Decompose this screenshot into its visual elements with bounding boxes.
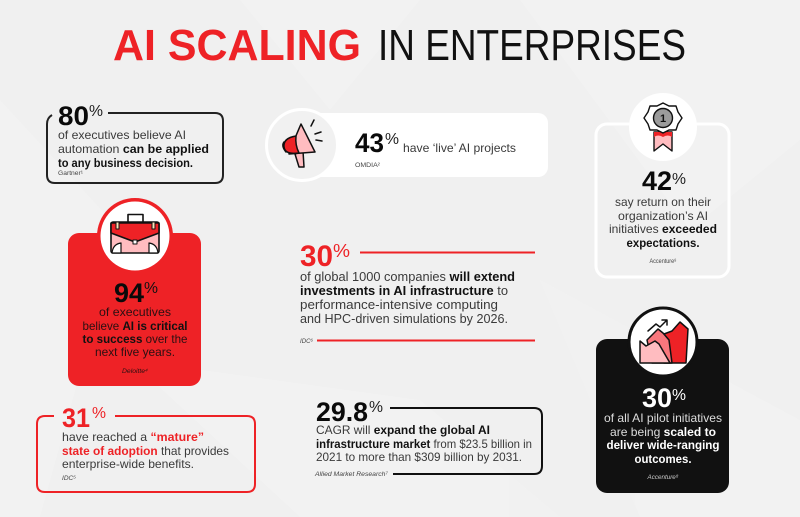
icon: award ribbon bbox=[644, 103, 682, 151]
panel: 94% executives: Deloitte⁴ bbox=[122, 368, 148, 375]
panel: 31% mature adoption: enterprise-wide benefits. bbox=[62, 457, 194, 471]
panel: 80% executives: % bbox=[89, 103, 103, 120]
panel: 80% executives: to any business decision. bbox=[58, 156, 193, 170]
panel: 30% global 1000: 30 bbox=[300, 240, 333, 273]
panel: 30% pilots: of all AI pilot initiatives bbox=[604, 411, 722, 425]
title: IN ENTERPRISES bbox=[378, 21, 686, 70]
panel: 30% global 1000 bbox=[300, 240, 535, 345]
panel: 42% return: say return on their bbox=[615, 195, 711, 209]
panel: 29.8% CAGR: infrastructure market from $23.5 billion in bbox=[316, 437, 532, 451]
panel: 29.8% CAGR: Allied Market Research⁷ bbox=[314, 471, 389, 478]
panel: 31% mature adoption: IDC⁵ bbox=[62, 475, 77, 482]
panel: 31% mature adoption: % bbox=[92, 405, 106, 422]
panel: 42% return: 42 bbox=[642, 166, 672, 196]
icon: rising chart bbox=[640, 320, 688, 363]
panel: 94% executives: 94 bbox=[114, 278, 144, 308]
icon: megaphone bbox=[283, 120, 322, 167]
panel: 42% return: 1 bbox=[660, 113, 666, 125]
panel: 30% global 1000: % bbox=[333, 241, 350, 261]
panel: 80% executives bbox=[47, 101, 223, 183]
panel: 30% global 1000: and HPC-driven simulations by 2026. bbox=[300, 312, 508, 326]
panel: 43% live projects: OMDIA² bbox=[355, 163, 380, 169]
panel: 31% mature adoption: state of adoption that provides bbox=[62, 444, 229, 458]
panel: 94% executives: % bbox=[144, 280, 158, 297]
panel: 30% global 1000: investments in AI infrastructure to bbox=[300, 284, 508, 298]
panel: 42% return: Accenture⁸ bbox=[650, 258, 677, 265]
panel: 30% pilots: are being scaled to bbox=[610, 425, 716, 439]
panel: 30% pilots: 30 bbox=[642, 383, 672, 413]
panel: 29.8% CAGR: 29.8 bbox=[316, 397, 368, 427]
panel: 30% pilots: outcomes. bbox=[634, 452, 692, 466]
panel: 30% global 1000: IDC⁶ bbox=[300, 338, 314, 345]
title: AI SCALING bbox=[113, 21, 361, 70]
panel: 43% live projects bbox=[266, 110, 548, 180]
title bbox=[113, 21, 686, 70]
panel: 42% return bbox=[596, 93, 729, 277]
panel: 31% mature adoption bbox=[37, 403, 255, 492]
panel: 80% executives: Gartner¹ bbox=[58, 171, 83, 177]
panel: 80% executives: 80 bbox=[58, 101, 89, 131]
panel: 94% executives: next five years. bbox=[95, 345, 175, 359]
panel: 29.8% CAGR: % bbox=[369, 399, 383, 416]
panel: 42% return: expectations. bbox=[626, 236, 700, 250]
panel: 30% pilots: % bbox=[672, 387, 686, 404]
panel: 30% global 1000: performance-intensive computing bbox=[300, 298, 498, 312]
panel: 29.8% CAGR: CAGR will expand the global AI bbox=[316, 423, 490, 437]
panel: 94% executives: of executives bbox=[99, 305, 171, 319]
panel: 29.8% CAGR: 2021 to more than $309 billion by 2031. bbox=[316, 450, 522, 464]
panel: 42% return: organization’s AI bbox=[618, 209, 708, 223]
panel: 30% pilots bbox=[596, 308, 729, 493]
panel: 42% return: initiatives exceeded bbox=[609, 222, 717, 236]
panel: 30% global 1000: of global 1000 companies will extend bbox=[300, 270, 515, 284]
panel: 80% executives: of executives believe AI bbox=[58, 128, 186, 142]
panel: 43% live projects: % bbox=[385, 131, 399, 148]
panel: 30% pilots: deliver wide-ranging bbox=[606, 438, 720, 452]
panel: 30% pilots: Accenture⁸ bbox=[646, 474, 679, 481]
panel: 43% live projects: 43 bbox=[355, 128, 384, 158]
panel: 31% mature adoption: have reached a “mature” bbox=[62, 430, 204, 444]
panel: 31% mature adoption: 31 bbox=[62, 403, 90, 433]
panel: 94% executives bbox=[68, 198, 201, 386]
panel: 29.8% CAGR bbox=[314, 397, 542, 478]
panel: 94% executives: to success over the bbox=[82, 332, 188, 346]
panel: 42% return: % bbox=[672, 171, 686, 188]
panel: 94% executives: believe AI is critical bbox=[82, 319, 188, 333]
panel: 80% executives: automation can be applied bbox=[58, 142, 209, 156]
icon: briefcase bbox=[111, 214, 159, 253]
panel: 43% live projects: have ‘live’ AI projects bbox=[403, 141, 516, 155]
